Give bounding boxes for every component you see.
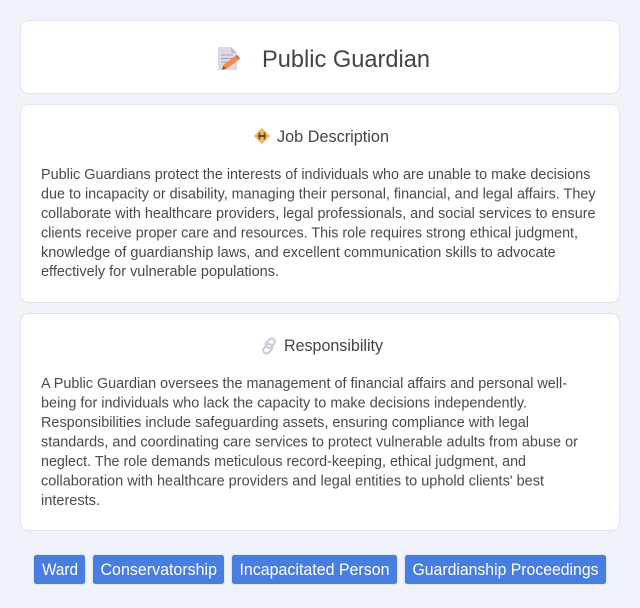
tag: Guardianship Proceedings: Guardianship Proceedings: [412, 561, 598, 579]
text block: responsibility: collaboration with healthcare providers and legal entities to uphold clients' best: [41, 474, 544, 490]
text block: responsibility: standards, and coordinating care services to protect vulnerable adults from abuse or: [41, 434, 578, 450]
tag: Ward: Ward: [42, 561, 78, 579]
panel: responsibility: [20, 314, 620, 530]
text block: job description: effectively for vulnerable populations.: [41, 264, 279, 280]
tags row: [34, 554, 606, 584]
text block: responsibility: being for individuals who lack the capacity to make decisions independently.: [41, 396, 527, 412]
tag: Incapacitated Person: Incapacitated Person: [240, 561, 390, 579]
tag: Conservatorship: Conservatorship: [100, 561, 217, 579]
heading: Job Description: Job Description: [277, 128, 389, 146]
text block: job description: collaborate with healthcare providers, legal professionals, and social services to ensure: [41, 206, 596, 222]
text block: responsibility: [41, 376, 578, 509]
tag: Guardianship Proceedings: [404, 554, 606, 584]
icon: link: [262, 337, 276, 355]
panel: job description: [20, 104, 620, 302]
text block: job description: knowledge of guardianship laws, and excellent communication skills to advocate: [41, 245, 556, 261]
heading: Responsibility: Responsibility: [284, 337, 384, 355]
tag: Incapacitated Person: [232, 554, 398, 584]
icon: construction sign: [254, 128, 270, 144]
tag: Conservatorship: [92, 554, 224, 584]
text block: job description: Public Guardians protect the interests of individuals who are unable to make decisions: [41, 167, 590, 183]
text block: job description: clients receive proper care and resources. This role requires strong ethical judgment,: [41, 226, 578, 242]
text block: job description: due to incapacity or disability, managing their personal, financial, and legal affairs. They: [41, 186, 596, 202]
text block: responsibility: A Public Guardian oversees the management of financial affairs and personal well-: [41, 376, 567, 392]
text block: job description: [41, 167, 596, 280]
heading: Public Guardian: Public Guardian: [262, 46, 430, 73]
icon: memo with pencil: [218, 47, 240, 70]
text block: responsibility: neglect. The role demands meticulous record-keeping, ethical judgment, and: [41, 454, 526, 470]
tag: Ward: [34, 554, 86, 584]
text block: responsibility: Responsibilities include safeguarding assets, ensuring compliance with legal: [41, 415, 529, 431]
panel: title: [20, 20, 620, 94]
text block: responsibility: interests.: [41, 493, 100, 509]
